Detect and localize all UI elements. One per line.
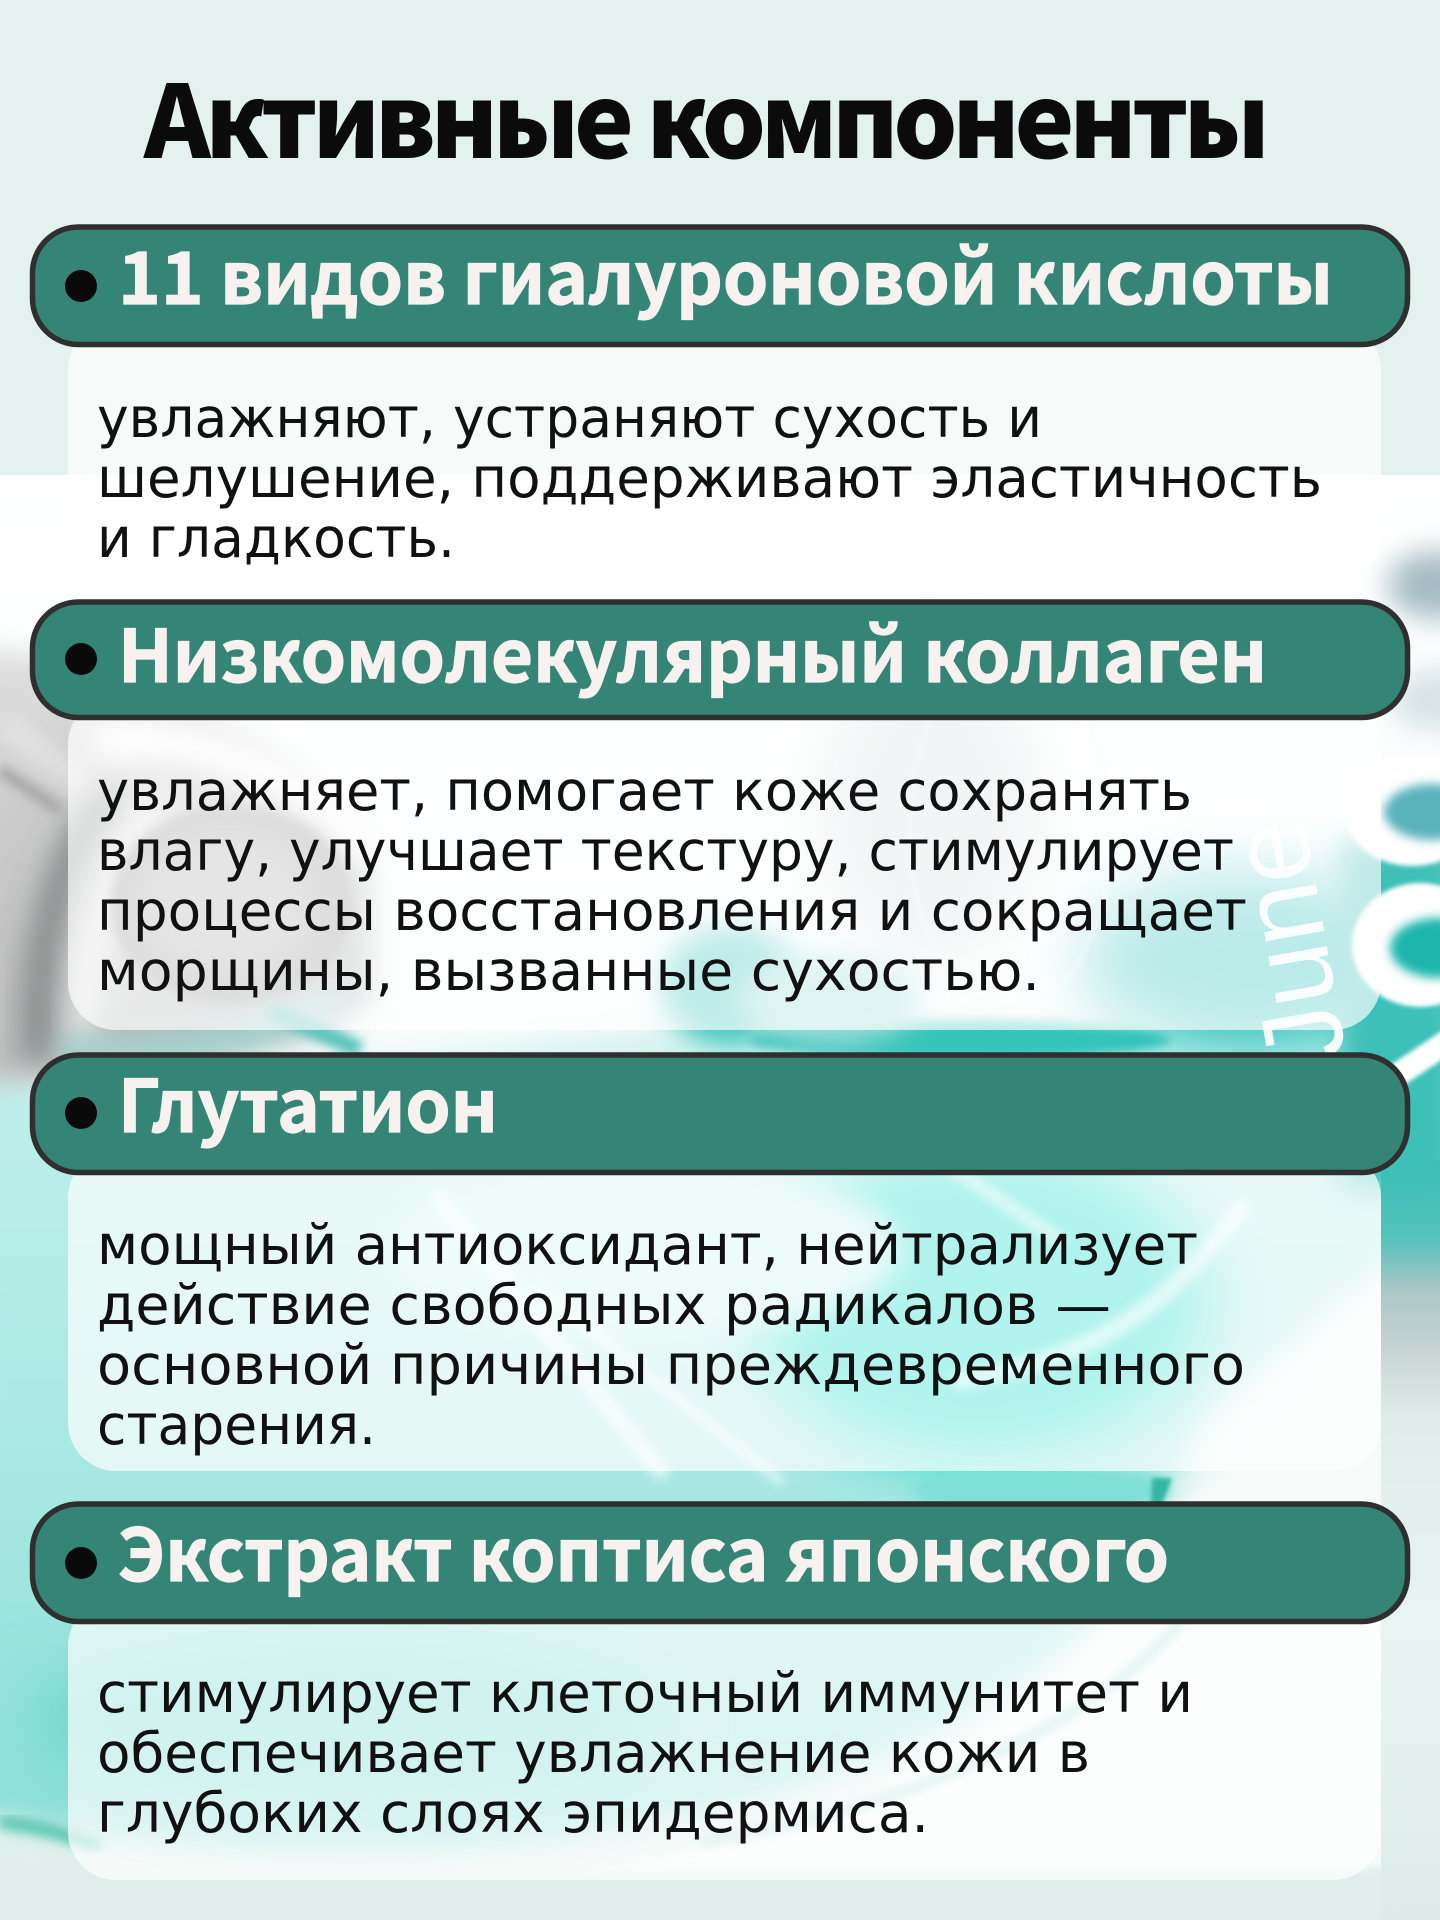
title: Активные компоненты: [143, 42, 1270, 188]
panel: glutathione text: действие свободных радикалов —: [97, 1273, 1111, 1337]
header: glutathione: [32, 1048, 1408, 1172]
bottle upper right corner: [1388, 551, 1440, 619]
panel: hyaluronic acid text: [68, 322, 1381, 586]
top background band: [0, 0, 1440, 475]
gel highlights: [440, 1120, 1240, 1480]
panel: hyaluronic acid text: увлажняют, устраняют сухость и: [97, 386, 1042, 450]
header: collagen: Низкомолекулярный коллаген: [118, 598, 1267, 703]
panel: glutathione text: основной причины преждевременного: [97, 1333, 1245, 1397]
panel: collagen text: морщины, вызванные сухостью.: [97, 939, 1040, 1003]
panel: coptis extract text: [68, 1598, 1381, 1880]
header: hyaluronic acid: 11 видов гиалуроновой кислоты: [118, 220, 1333, 325]
background photo: serum bottle and gel: [0, 470, 1440, 1920]
clear bowl area at lower right: [520, 1290, 1440, 1920]
panel: coptis extract text: глубоких слоях эпидермиса.: [97, 1781, 929, 1845]
gel liquid: [0, 1010, 1440, 1849]
panel: glutathione text: мощный антиоксидант, нейтрализует: [97, 1213, 1198, 1277]
panel: glutathione text: старения.: [97, 1393, 376, 1457]
metal cap: [0, 650, 380, 1085]
panel: glutathione text: [68, 1150, 1381, 1471]
panel: hyaluronic acid text: и гладкость.: [97, 506, 455, 570]
panel: collagen text: процессы восстановления и сокращает: [97, 879, 1247, 943]
header: glutathione: Глутатион: [118, 1048, 498, 1153]
bottle neck: [660, 650, 1420, 1050]
header: coptis extract: Экстракт коптиса японского: [118, 1497, 1169, 1602]
panel: collagen text: влагу, улучшает текстуру, стимулирует: [97, 819, 1234, 883]
header: coptis extract: [32, 1497, 1408, 1622]
panel: hyaluronic acid text: шелушение, поддерживают эластичность: [97, 446, 1322, 510]
panel: coptis extract text: обеспечивает увлажнение кожи в: [97, 1721, 1090, 1785]
panel: collagen text: [68, 696, 1381, 1030]
panel: collagen text: увлажняет, помогает коже сохранять: [97, 759, 1192, 823]
bottle print: digits: [1204, 670, 1440, 1190]
panel: coptis extract text: стимулирует клеточный иммунитет и: [97, 1661, 1193, 1725]
bottle print: digits: June: [1204, 812, 1370, 1073]
